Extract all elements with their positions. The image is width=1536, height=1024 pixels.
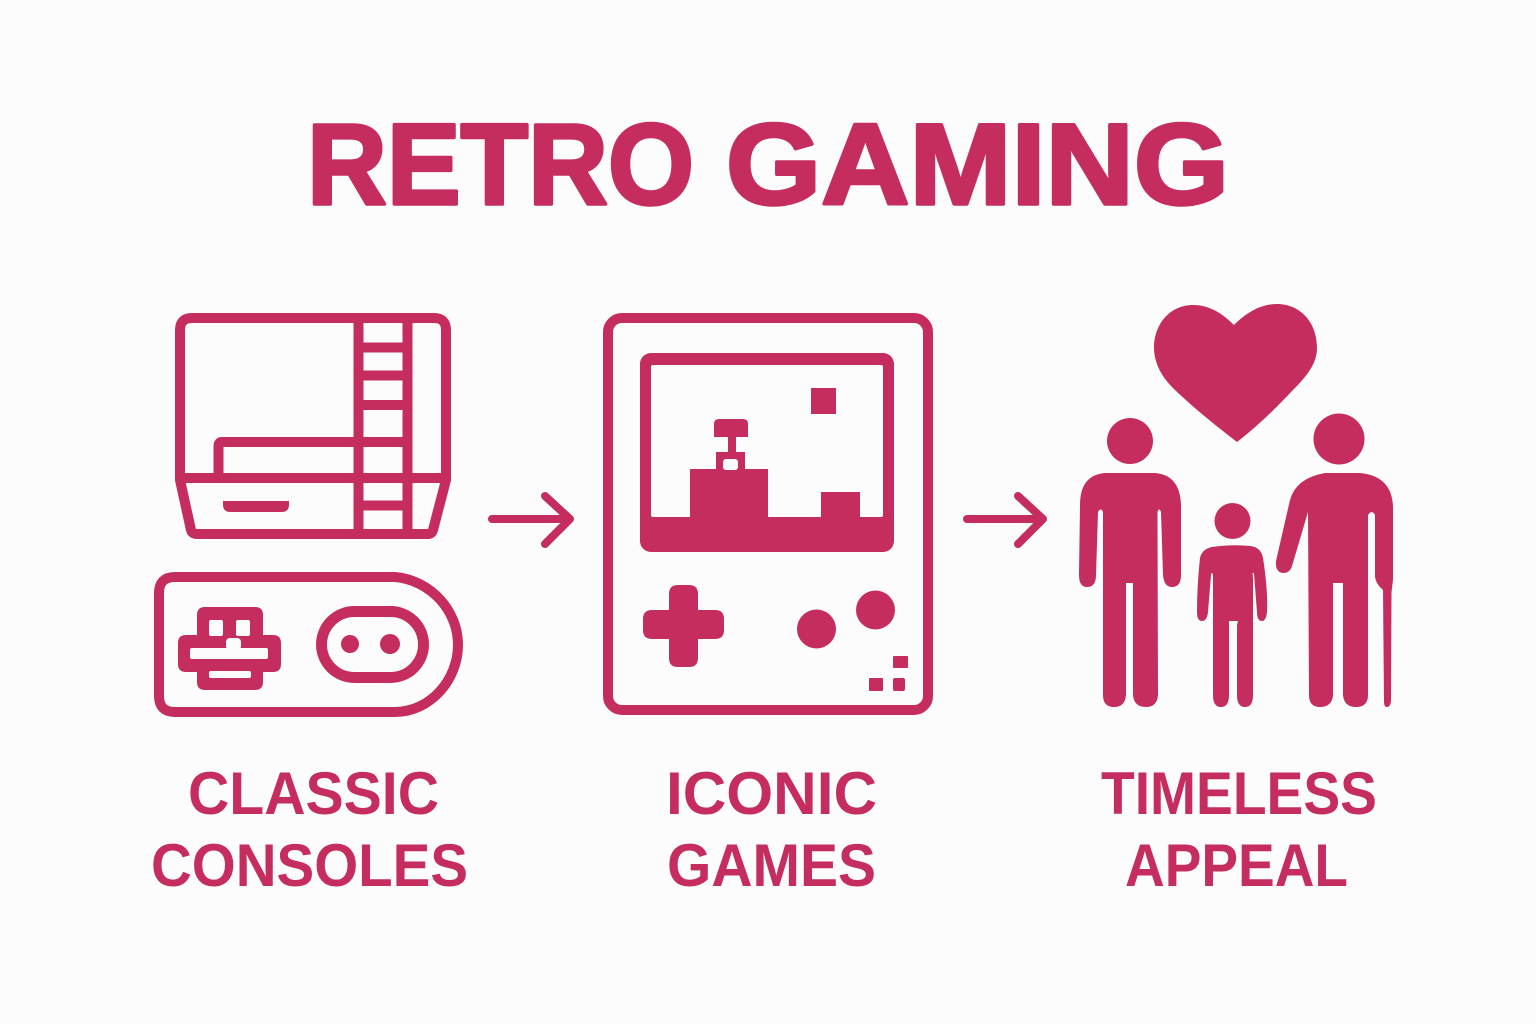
icon: console xyxy=(180,318,446,534)
label: iconic games xyxy=(666,760,877,899)
label: timeless appeal: APPEAL xyxy=(1125,832,1348,899)
label: timeless appeal: TIMELESS xyxy=(1101,760,1377,827)
screen xyxy=(640,353,894,552)
elder figure with cane xyxy=(1276,414,1393,707)
label: classic consoles: CONSOLES xyxy=(151,832,468,899)
icon: controller xyxy=(159,577,458,712)
arrow: consoles to games xyxy=(492,496,570,544)
adult figure xyxy=(1079,418,1181,707)
panel: timeless appeal xyxy=(1079,304,1393,899)
child figure xyxy=(1197,503,1267,707)
label: classic consoles: CLASSIC xyxy=(188,760,439,827)
panel: iconic games xyxy=(608,318,928,899)
buttons xyxy=(797,590,908,691)
icon: family with heart xyxy=(1079,304,1393,707)
label: iconic games: GAMES xyxy=(667,832,876,899)
label: iconic games: ICONIC xyxy=(666,760,877,827)
d-pad xyxy=(643,585,724,667)
arrow: games to appeal xyxy=(967,496,1043,544)
label: classic consoles xyxy=(151,760,468,899)
panel: classic consoles xyxy=(151,318,468,899)
title: GAMING xyxy=(726,101,1229,229)
heart xyxy=(1154,304,1317,442)
title xyxy=(307,101,1229,229)
icon: handheld xyxy=(608,318,928,710)
title: RETRO xyxy=(307,101,694,229)
label: timeless appeal xyxy=(1101,760,1377,899)
